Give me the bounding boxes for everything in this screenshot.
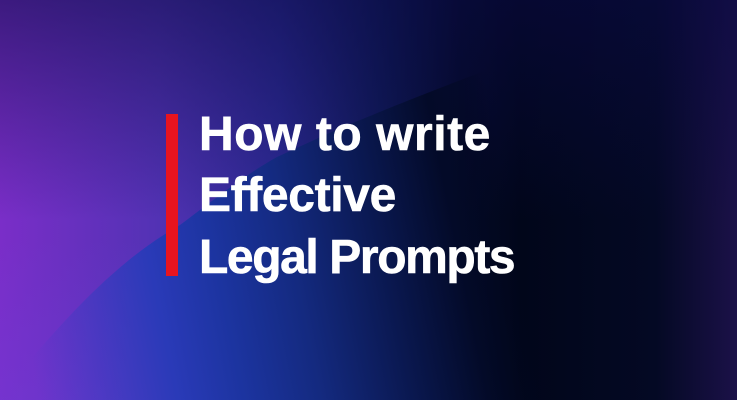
title: How to write <box>199 108 491 160</box>
title <box>199 108 514 284</box>
title: Legal Prompts <box>199 230 514 284</box>
title: Effective <box>199 169 396 222</box>
accent bar <box>166 114 178 276</box>
